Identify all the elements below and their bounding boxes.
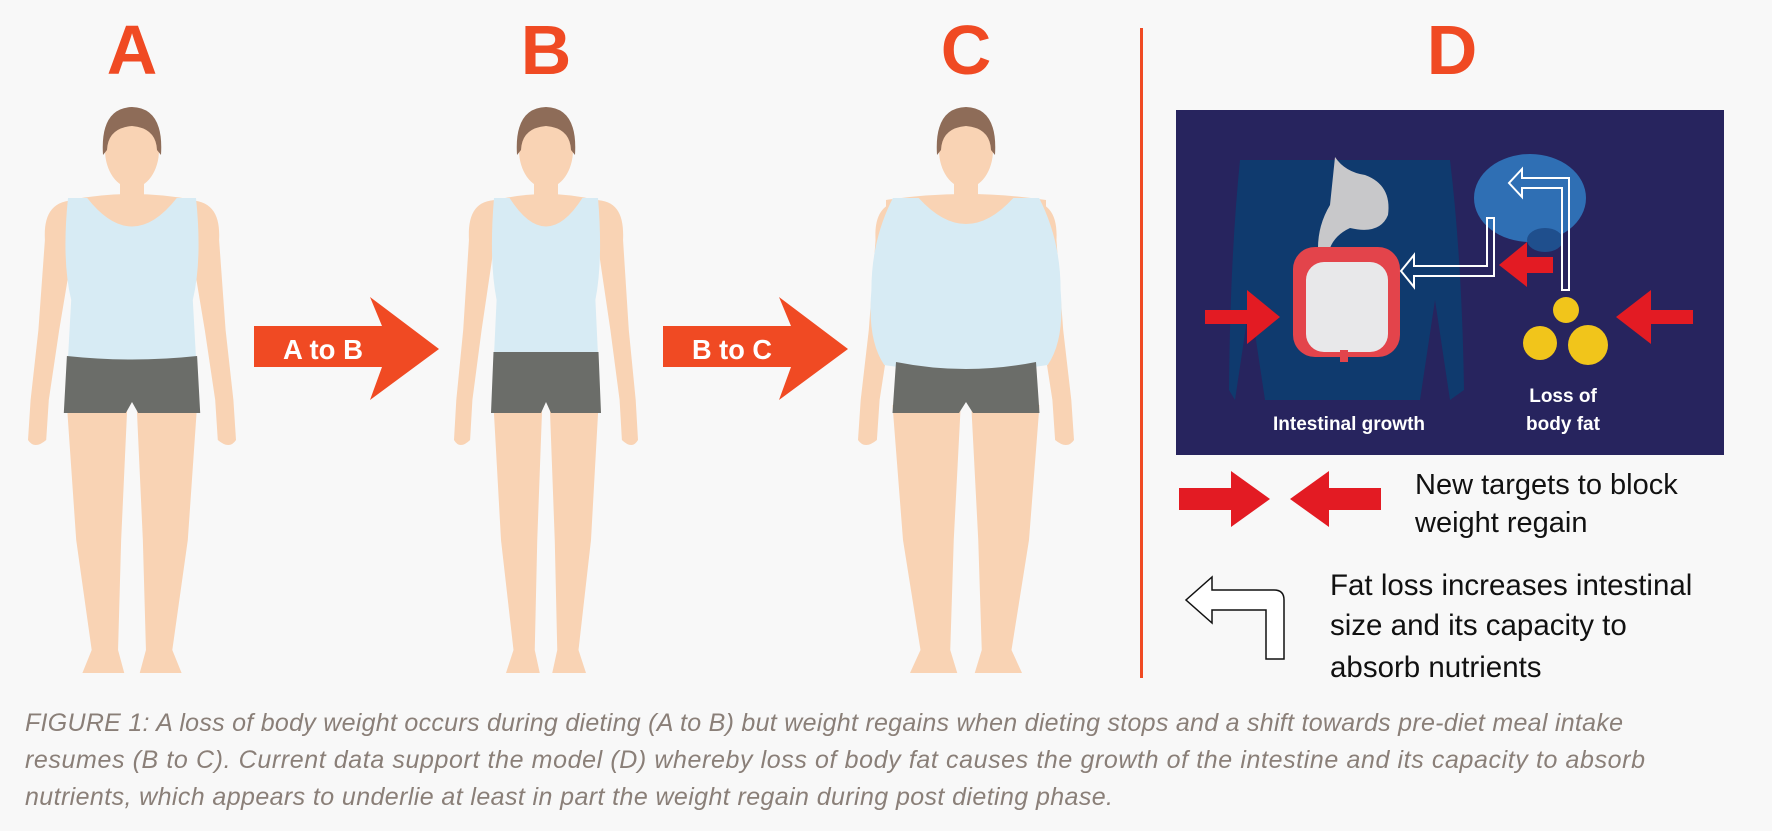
figure C: [858, 107, 1074, 673]
white hook arrow 2: [1509, 169, 1569, 290]
panel D: Loss of: [1529, 386, 1597, 407]
white hook arrow 1: [1401, 218, 1494, 287]
legend text 1: weight regain: [1414, 507, 1588, 539]
fat cells: [1523, 297, 1608, 365]
label D: D: [1427, 11, 1477, 89]
body silhouette: [1229, 160, 1464, 400]
legend text 2: size and its capacity to: [1330, 609, 1627, 642]
legend hook arrow: [1186, 577, 1284, 659]
label C: C: [941, 11, 991, 89]
colon: [1293, 247, 1400, 362]
label A: A: [107, 11, 157, 89]
arrow B to C: [663, 297, 848, 400]
divider: [1140, 28, 1143, 678]
panel labels: Intestinal growth: [1273, 414, 1425, 435]
caption: FIGURE 1: A loss of body weight occurs during dieting (A to B) but weight regains when dieting stops and a shift towards pre-diet meal intake: [25, 709, 1623, 737]
arrow B to C: B to C: [692, 334, 772, 365]
stomach: [1318, 157, 1389, 248]
caption: nutrients, which appears to underlie at least in part the weight regain during post dieting phase.: [25, 783, 1113, 811]
label B: B: [521, 11, 571, 89]
legend text 1: New targets to block: [1415, 469, 1678, 501]
legend text 2: absorb nutrients: [1330, 651, 1542, 684]
red arrows in panel: [1205, 290, 1280, 344]
legend: red arrows: [1179, 471, 1381, 527]
arrow A to B: [254, 297, 439, 400]
figure A: [28, 107, 236, 673]
panel D: [1176, 110, 1724, 455]
legend text 2: Fat loss increases intestinal: [1330, 569, 1692, 602]
caption: resumes (B to C). Current data support the model (D) whereby loss of body fat causes the growth of the intestine and its capacity to absorb: [25, 746, 1645, 774]
figure B: [454, 107, 638, 673]
brain: [1474, 154, 1586, 242]
panel D: body fat: [1526, 414, 1601, 435]
arrow A to B: A to B: [283, 334, 363, 365]
